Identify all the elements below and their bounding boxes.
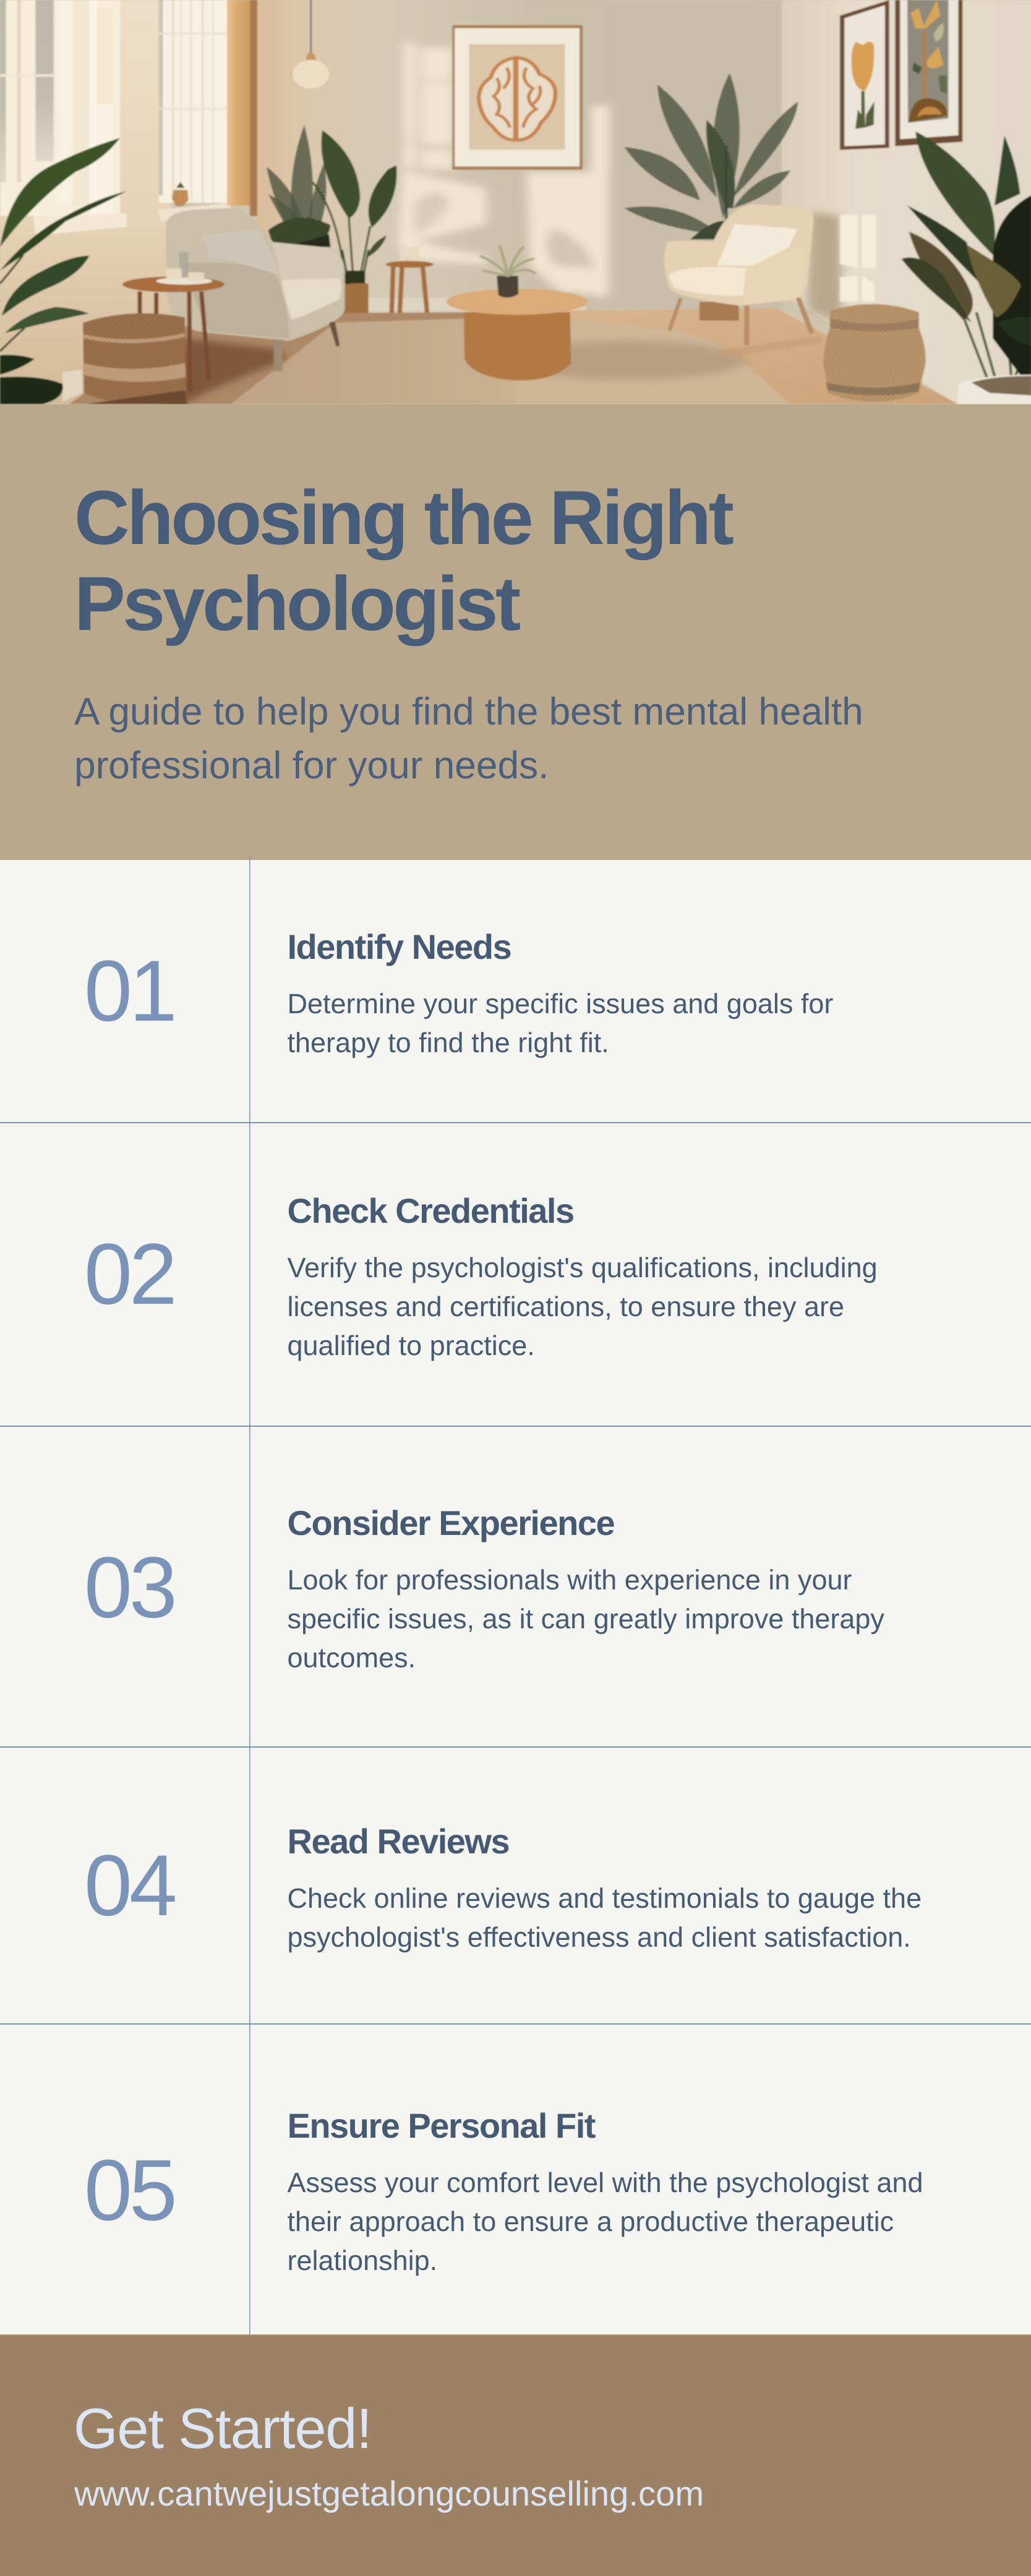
indoor fern beside the armchair <box>267 125 331 247</box>
step 04: Check online reviews and testimonials to gauge the <box>287 1882 922 1914</box>
step 02: Check Credentials <box>287 1191 574 1230</box>
step 03 <box>84 1503 884 1673</box>
step 01: therapy to find the right fit. <box>287 1027 609 1058</box>
website url: www.cantwejustgetalongcounselling.com <box>74 2474 704 2513</box>
armchair, left <box>166 208 344 372</box>
step 02: licenses and certifications, to ensure they are <box>287 1291 844 1322</box>
broad-leaf plant in woven pot <box>312 130 396 320</box>
right half of room contents <box>625 0 1031 404</box>
round coffee table with potted plant <box>447 246 588 380</box>
step 03: 03 <box>84 1539 174 1636</box>
step 05: Ensure Personal Fit <box>287 2106 596 2145</box>
second window and curtain <box>158 0 257 222</box>
step 05: Assess your comfort level with the psychologist and <box>287 2167 923 2198</box>
step 04: Read Reviews <box>287 1822 509 1861</box>
step 02: Verify the psychologist's qualifications, including <box>287 1252 878 1283</box>
pendant lamp <box>293 0 329 88</box>
step 03: specific issues, as it can greatly improve therapy <box>287 1603 884 1634</box>
step 03: Consider Experience <box>287 1503 614 1542</box>
header panel <box>0 404 1031 860</box>
call to action: Get Started! <box>74 2397 372 2460</box>
subtitle <box>74 691 863 787</box>
step 05: their approach to ensure a productive therapeutic <box>287 2206 894 2237</box>
wooden floor and rug, right <box>509 308 958 404</box>
woven basket <box>83 313 186 402</box>
title <box>74 475 734 647</box>
back wall with sunlight <box>257 0 783 315</box>
title: Choosing the Right <box>74 475 734 561</box>
step 02: qualified to practice. <box>287 1330 535 1361</box>
step 03: Look for professionals with experience in your <box>287 1564 852 1596</box>
right side wall <box>782 0 1031 404</box>
step 05 <box>84 2106 923 2276</box>
palm fronds <box>625 73 798 239</box>
small side stool with candles <box>385 247 434 314</box>
step 02: 02 <box>84 1225 174 1322</box>
step 04: 04 <box>84 1837 175 1934</box>
steps panel <box>0 857 1031 2335</box>
step 01: Identify Needs <box>287 927 511 966</box>
framed brain artwork <box>452 25 583 169</box>
step 01 <box>84 927 833 1058</box>
wooden floor and rug, left <box>69 312 516 404</box>
step 02 <box>84 1191 878 1361</box>
large foreground plant, right <box>901 132 1031 404</box>
step 05: relationship. <box>287 2245 437 2276</box>
woven stool basket <box>823 304 926 402</box>
cream armchair <box>664 204 813 344</box>
step 01: Determine your specific issues and goals for <box>287 988 833 1019</box>
subtitle: professional for your needs. <box>74 744 549 787</box>
left wall and first window <box>0 0 171 404</box>
subtitle: A guide to help you find the best mental health <box>74 691 863 733</box>
round side table with cups <box>122 252 225 391</box>
step 03: outcomes. <box>287 1642 416 1673</box>
title: Psychologist <box>74 561 520 647</box>
step 01: 01 <box>84 942 174 1039</box>
step 04 <box>84 1822 922 1953</box>
hero photo: sunlit therapy room <box>0 0 1031 404</box>
step 04: psychologist's effectiveness and client satisfaction. <box>287 1921 911 1953</box>
step 05: 05 <box>84 2141 174 2238</box>
footer panel <box>0 2334 1031 2576</box>
two framed botanical prints <box>840 0 962 150</box>
foreground plant, left <box>0 138 187 404</box>
